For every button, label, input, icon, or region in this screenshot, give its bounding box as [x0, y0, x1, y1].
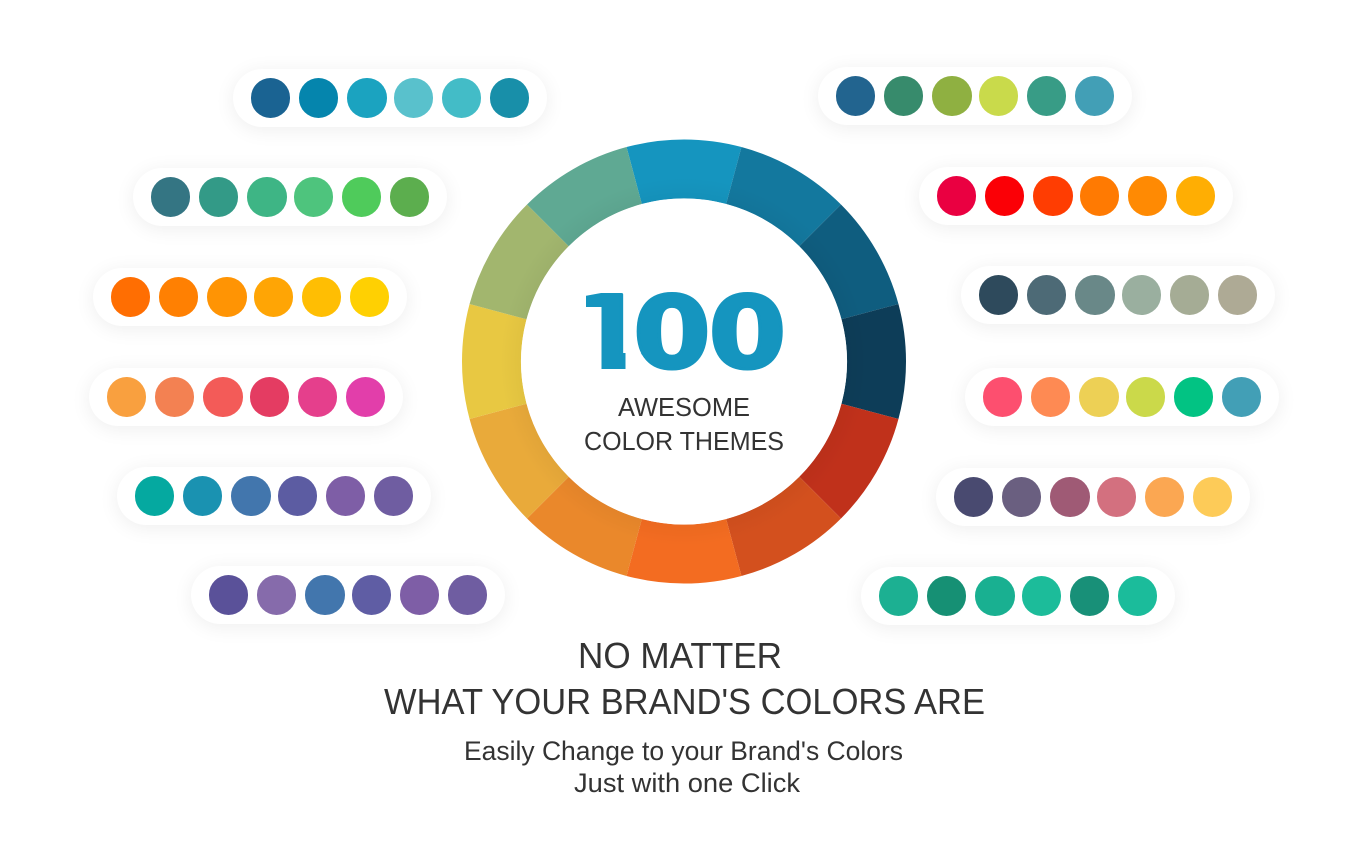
palette pill: red to amber tones	[919, 167, 1233, 225]
palette pill: peach to magenta tones	[89, 368, 403, 426]
palette pill: orange to yellow tones	[93, 268, 407, 326]
heading line two: WHAT YOUR BRAND'S COLORS ARE	[384, 681, 985, 722]
heading line one: NO MATTER	[578, 635, 782, 676]
label: color themes: COLOR THEMES	[584, 426, 784, 456]
color wheel	[462, 139, 906, 584]
palette pill: blue to lime tones	[818, 67, 1132, 125]
palette pill: teal to violet tones	[117, 467, 431, 525]
palette pill: indigo to violet tones	[191, 566, 505, 624]
big number 100: 100	[570, 275, 786, 392]
palette pill: mixed bright tones	[965, 368, 1279, 426]
palette pill: emerald tones	[861, 567, 1175, 625]
palette pill: muted slate tones	[961, 266, 1275, 324]
label: awesome: AWESOME	[618, 392, 750, 422]
subheading line two: Just with one Click	[574, 768, 800, 798]
palette pill: green tones	[133, 168, 447, 226]
subheading line one: Easily Change to your Brand's Colors	[464, 736, 903, 766]
palette pill: blue tones	[233, 69, 547, 127]
palette pill: dusk tones	[936, 468, 1250, 526]
